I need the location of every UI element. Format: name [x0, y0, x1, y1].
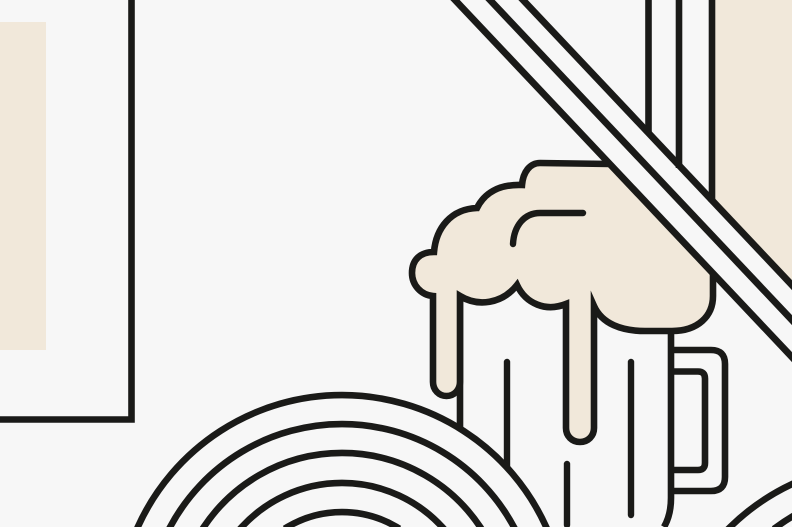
beer foam with drips: [412, 163, 713, 442]
mug handle: [671, 350, 725, 491]
mug body: [460, 296, 671, 527]
foam highlight: [513, 213, 583, 244]
icon: beer mug: [412, 163, 725, 527]
panel: right beige block: [715, 0, 792, 285]
concentric arcs: [138, 395, 546, 527]
arcs bottom right: [730, 484, 792, 527]
mug highlight lines: [507, 362, 631, 525]
panel: left beige block: [0, 22, 46, 350]
vertical stripes top right: [648, 0, 712, 202]
diagonal stripes: [452, 0, 792, 360]
panel: left frame outline: [0, 0, 132, 420]
